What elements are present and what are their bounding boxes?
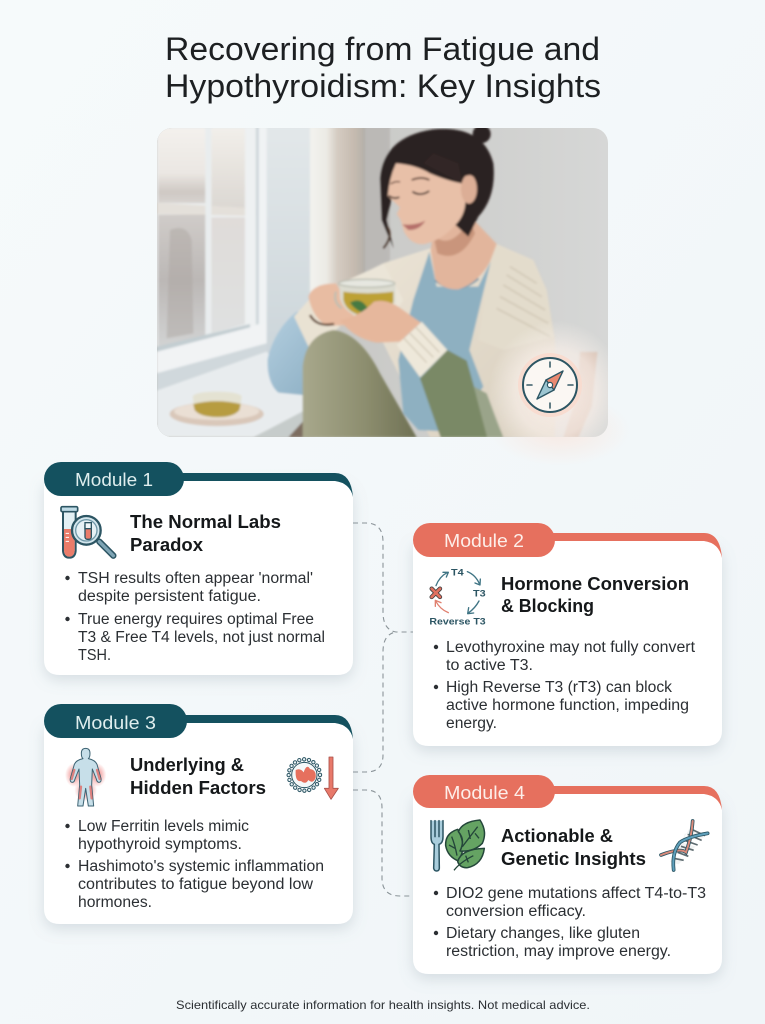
icon: compass	[518, 353, 582, 417]
icon: T4 T3 reverse T3 cycle	[429, 568, 486, 626]
module 2 heading: Hormone Conversion	[501, 573, 689, 594]
icon: thyroid cells and down arrow	[289, 757, 338, 799]
module 2 tab	[413, 523, 555, 557]
module 1 bullets: TSH.	[78, 647, 111, 664]
module 2 heading	[501, 573, 689, 616]
module 4 tab: Module 4	[444, 783, 525, 803]
module 3 bullets: hormones.	[78, 894, 152, 911]
module 1 bullets: despite persistent fatigue.	[78, 588, 261, 605]
photo: woman drinking tea by a window	[157, 125, 624, 464]
panel: module 3	[44, 704, 353, 924]
module 1 bullets	[65, 570, 325, 664]
module 2 bullets: to active T3.	[446, 657, 533, 674]
window	[157, 128, 253, 348]
module 3 bullets: hypothyroid symptoms.	[78, 836, 242, 853]
module 4 bullets: DIO2 gene mutations affect T4-to-T3	[446, 885, 706, 902]
icon: fork and leaves	[431, 820, 485, 871]
module 2 bullets: energy.	[446, 715, 497, 732]
icon: test tube and magnifier	[61, 507, 113, 558]
module 1 heading: The Normal Labs	[130, 511, 281, 532]
far hand	[340, 301, 421, 343]
module 4 heading: Actionable &	[501, 825, 613, 846]
module 3 bullets: contributes to fatigue beyond low	[78, 876, 314, 893]
shirt	[398, 252, 491, 432]
module 2 bullets: Levothyroxine may not fully convert	[446, 639, 696, 656]
module 3 heading	[130, 754, 266, 798]
icon: T4 T3 reverse T3 cycle: Reverse T3	[429, 616, 486, 626]
wall and curtain	[266, 128, 311, 354]
module 2 bullets: active hormone function, impeding	[446, 697, 689, 714]
face	[388, 163, 465, 244]
icon: T4 T3 reverse T3 cycle: T4	[451, 568, 464, 578]
neck and chest	[431, 217, 497, 289]
module 4 heading: Genetic Insights	[501, 848, 646, 869]
pants	[303, 330, 417, 437]
module 3 bullets	[65, 818, 324, 911]
footer note: Scientifically accurate information for health insights. Not medical advice.	[176, 998, 590, 1012]
module 2 heading: & Blocking	[501, 595, 594, 616]
panel: module 2	[413, 523, 722, 746]
module 1 heading: Paradox	[130, 534, 204, 555]
module 1 heading	[130, 511, 281, 555]
module 3 heading: Underlying &	[130, 754, 244, 775]
module 4 bullets: Dietary changes, like gluten	[446, 925, 640, 942]
module 3 heading: Hidden Factors	[130, 777, 266, 798]
module 1 tab	[44, 462, 184, 496]
title: Hypothyroidism: Key Insights	[165, 68, 601, 104]
glass cup with tea	[335, 292, 342, 308]
title	[165, 31, 601, 104]
compass glow	[496, 329, 608, 437]
icon: human body with inflamed areas	[65, 748, 106, 806]
green sleeve	[420, 350, 487, 437]
module 3 tab	[44, 704, 187, 738]
module 1 tab: Module 1	[75, 470, 153, 490]
icon: T4 T3 reverse T3 cycle: T3	[473, 588, 486, 598]
module 4 bullets: conversion efficacy.	[446, 903, 586, 920]
left blue sleeve	[267, 312, 337, 395]
dashed connectors	[353, 523, 413, 896]
cardigan back and right side	[383, 248, 532, 437]
panel: module 4	[413, 775, 722, 974]
panel: module 1	[44, 462, 353, 675]
module 2 bullets	[434, 639, 696, 732]
module 2 bullets: High Reverse T3 (rT3) can block	[446, 679, 672, 696]
module 4 heading	[501, 825, 646, 869]
hair back	[380, 129, 494, 248]
module 1 bullets: True energy requires optimal Free	[78, 611, 314, 628]
module 4 tab	[413, 775, 555, 808]
module 4 bullets	[434, 885, 706, 960]
module 1 bullets: T3 & Free T4 levels, not just normal	[78, 629, 325, 646]
chair	[563, 352, 597, 437]
photo glow below frame	[490, 394, 630, 466]
module 3 tab: Module 3	[75, 713, 156, 733]
icon: DNA helix	[661, 821, 708, 870]
cuff	[397, 322, 447, 377]
module 4 bullets: restriction, may improve energy.	[446, 943, 671, 960]
title: Recovering from Fatigue and	[165, 31, 600, 67]
near hand	[308, 283, 358, 326]
module 3 bullets: Hashimoto's systemic inflammation	[78, 858, 324, 875]
saucer and glass cup	[169, 407, 264, 427]
module 1 bullets: TSH results often appear 'normal'	[78, 570, 313, 587]
right wall darker strip beside curtain	[363, 127, 390, 287]
module 2 tab: Module 2	[444, 531, 524, 551]
module 3 bullets: Low Ferritin levels mimic	[78, 818, 249, 835]
